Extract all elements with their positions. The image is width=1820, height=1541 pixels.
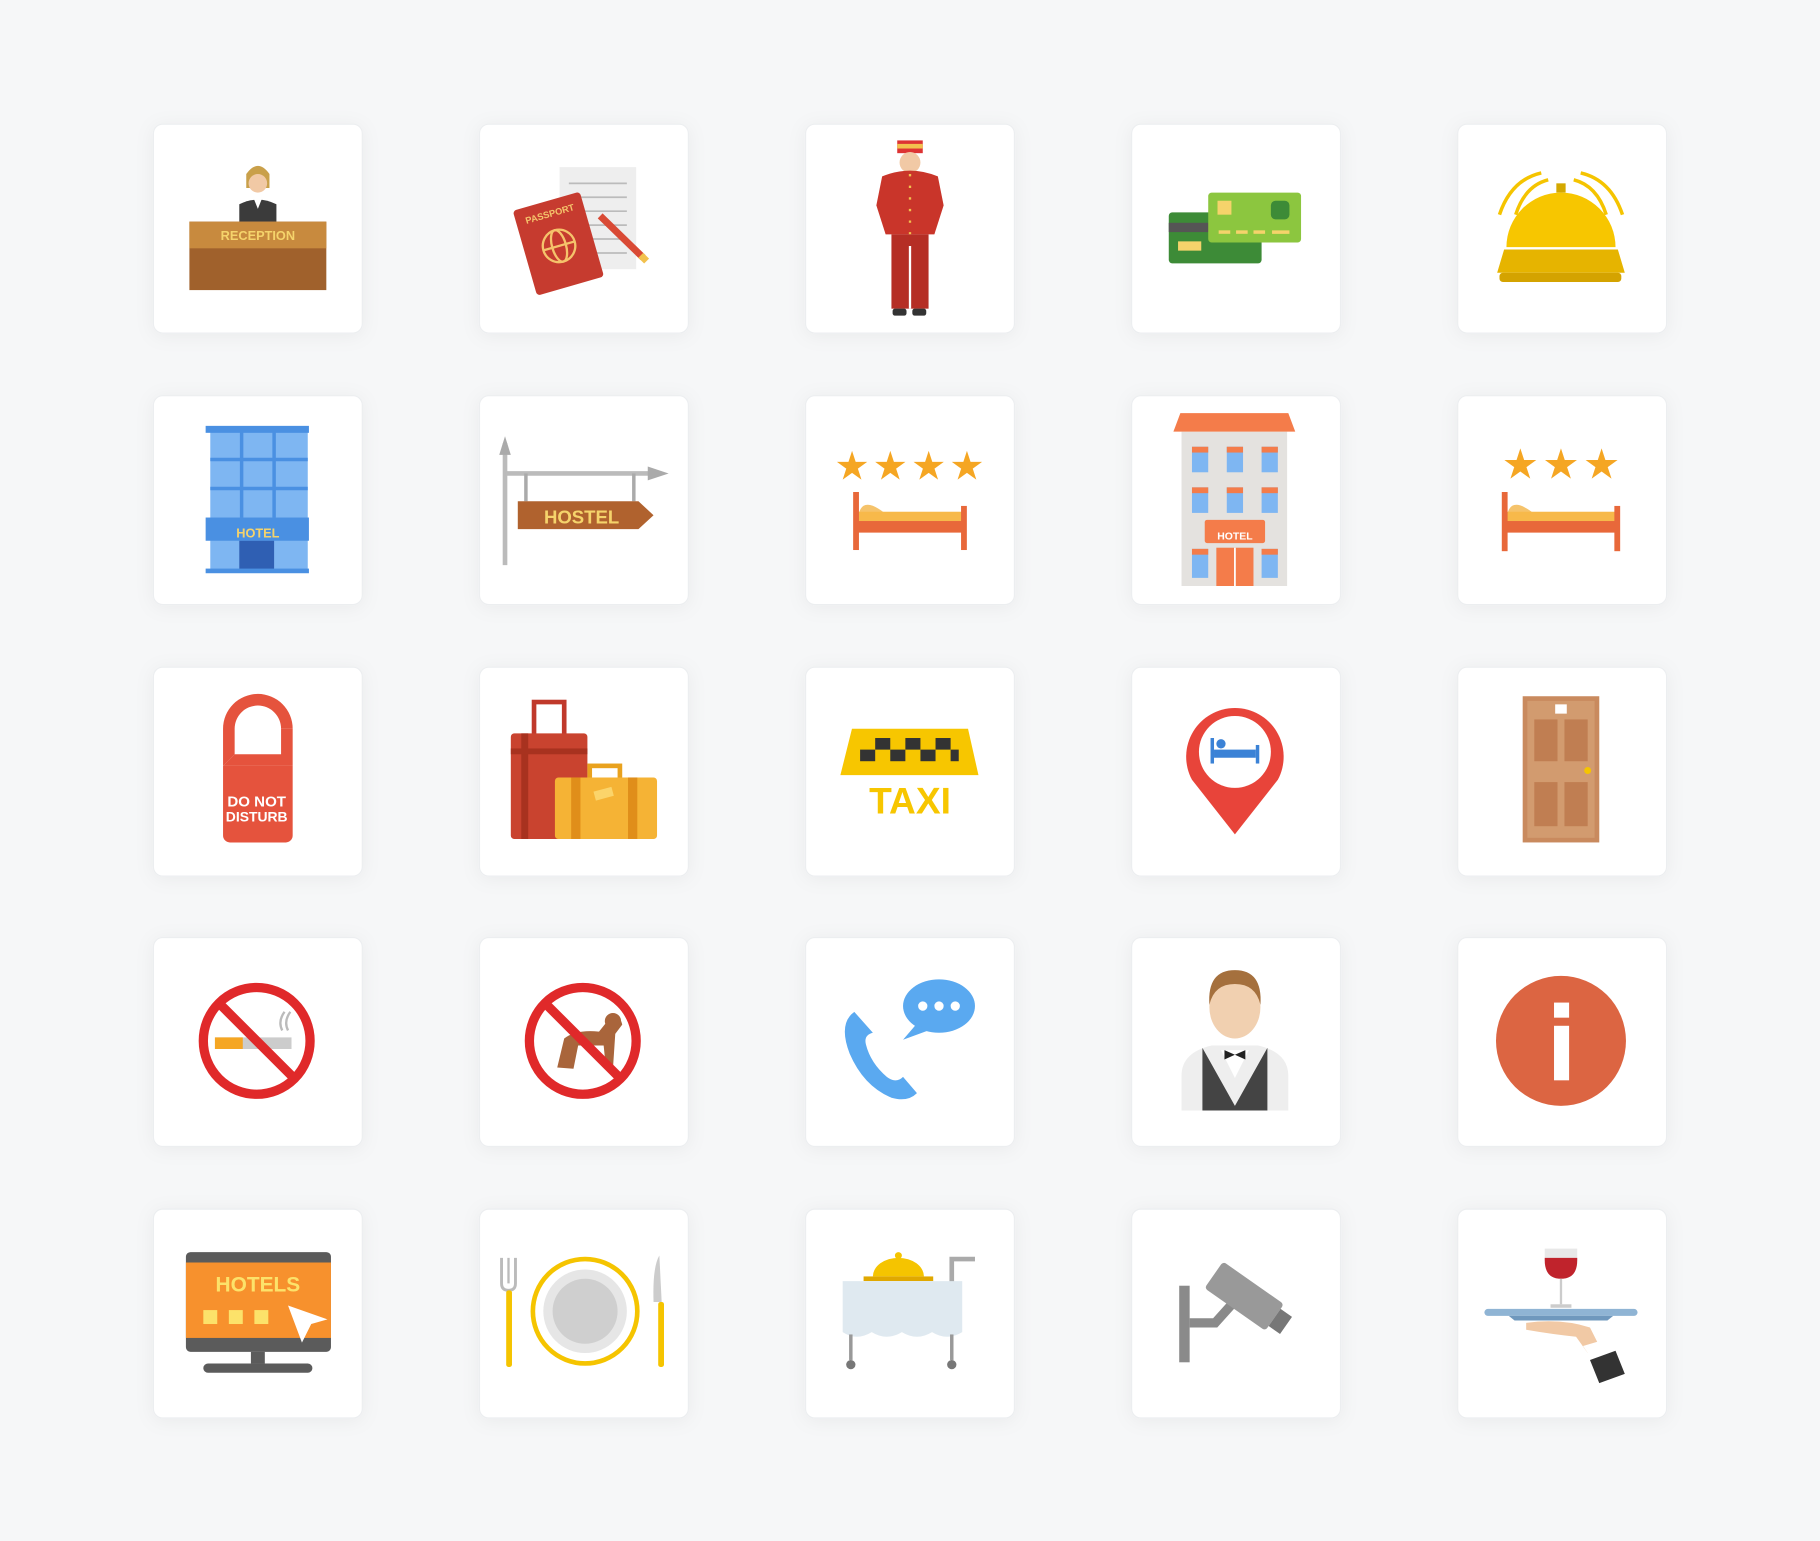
icon: bellboy <box>876 140 944 316</box>
icon: four-star bed: ★ <box>913 447 944 486</box>
icon: phone call with chat bubble <box>845 979 975 1099</box>
icon: credit cards <box>1169 193 1301 263</box>
icon: three-star bed: ★ <box>1504 443 1537 485</box>
icon: hotel building orange: HOTEL <box>1217 532 1253 543</box>
icon: security camera <box>1179 1262 1295 1362</box>
icon: hotel location pin <box>1186 708 1284 834</box>
icon: passport <box>513 167 647 296</box>
icon: three-star bed: ★ <box>1544 443 1578 485</box>
icon: reception: RECEPTION <box>221 228 295 243</box>
icon: plate and cutlery <box>502 1256 664 1367</box>
icon: hotel building blue: HOTEL <box>236 525 280 540</box>
icon: hotels monitor: HOTELS <box>216 1274 300 1297</box>
icon: taxi sign <box>840 729 978 821</box>
icon: hotel room door <box>1523 696 1599 842</box>
icon: do not disturb hanger: DO NOT <box>227 793 287 810</box>
icon: room service cart <box>843 1252 975 1369</box>
icon: hotel building orange <box>1173 413 1295 586</box>
icon: hostel sign <box>499 436 669 565</box>
icon: four-star bed: ★ <box>951 447 982 486</box>
icon: no pets <box>529 987 636 1094</box>
icon: four-star bed <box>836 447 982 550</box>
icon: taxi sign: TAXI <box>869 779 951 821</box>
icon: four-star bed: ★ <box>875 447 906 486</box>
icon: three-star bed <box>1502 443 1620 551</box>
icon: luggage <box>511 702 657 839</box>
icon: service bell <box>1497 173 1625 282</box>
icon: three-star bed: ★ <box>1585 443 1618 485</box>
icon: do not disturb hanger: DISTURB <box>226 809 288 825</box>
icon: passport: PASSPORT <box>524 202 576 226</box>
icon: reception <box>189 166 326 290</box>
icon: waiter <box>1182 970 1288 1110</box>
icon: hotel building blue <box>206 426 309 573</box>
icon: do not disturb hanger <box>223 694 293 842</box>
icon: four-star bed: ★ <box>836 447 868 486</box>
icon: no smoking <box>203 987 310 1094</box>
icon: information <box>1496 976 1626 1106</box>
icon: hostel sign: HOSTEL <box>544 506 619 527</box>
icon: waiter tray with wine <box>1484 1249 1638 1383</box>
icon: hotels monitor <box>186 1252 331 1373</box>
